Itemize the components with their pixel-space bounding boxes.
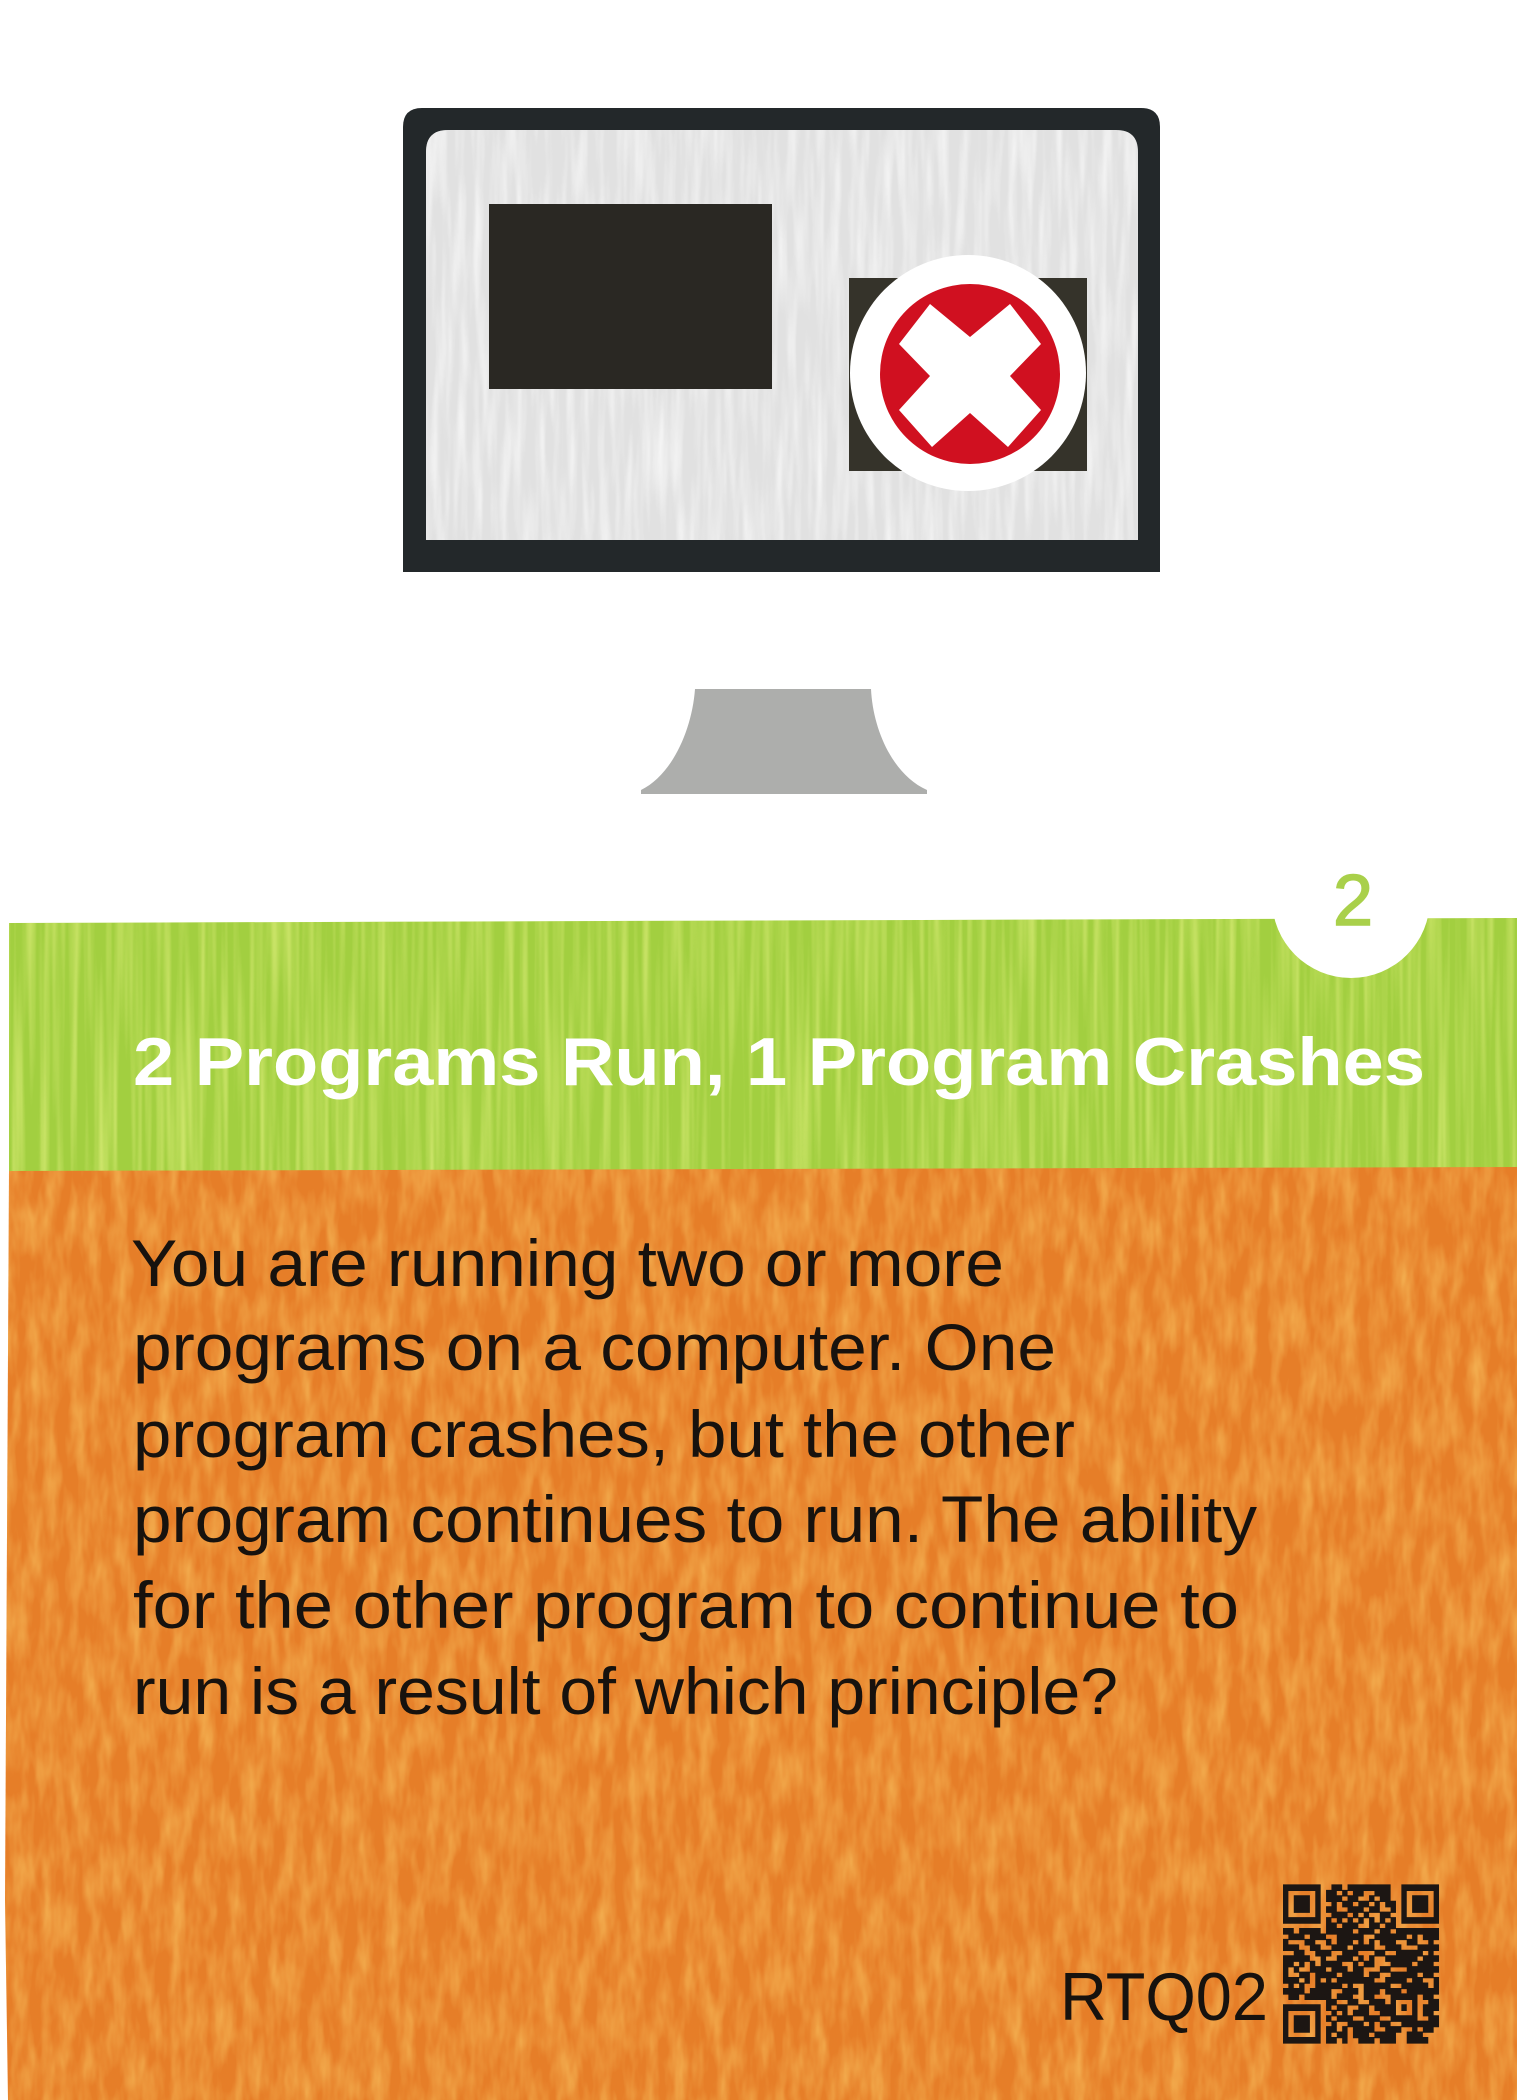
question text: programs on a computer. One bbox=[133, 1310, 1056, 1384]
question text bbox=[131, 1226, 1257, 1728]
panel: orange question area bbox=[0, 1165, 1517, 2100]
question text: for the other program to continue to bbox=[133, 1568, 1239, 1642]
question text: program continues to run. The ability bbox=[133, 1482, 1257, 1556]
monitor stand bbox=[641, 689, 927, 794]
card number badge bbox=[1272, 820, 1430, 978]
card number badge: 2 bbox=[1333, 861, 1373, 941]
monitor frame bbox=[403, 108, 1160, 572]
question text: run is a result of which principle? bbox=[133, 1654, 1118, 1728]
heading: 2 Programs Run, 1 Program Crashes bbox=[133, 1024, 1425, 1100]
crashed program window bbox=[849, 278, 1087, 471]
icon: crash error badge bbox=[850, 255, 1086, 491]
question text: program crashes, but the other bbox=[133, 1397, 1075, 1471]
panel: green title band bbox=[0, 915, 1517, 1175]
monitor screen bbox=[426, 130, 1141, 540]
icon: computer monitor bbox=[403, 108, 1160, 794]
running program window bbox=[489, 204, 772, 389]
QR code bbox=[1283, 1888, 1439, 2040]
question text: You are running two or more bbox=[131, 1226, 1004, 1300]
card code: RTQ02 bbox=[1060, 1959, 1268, 2035]
